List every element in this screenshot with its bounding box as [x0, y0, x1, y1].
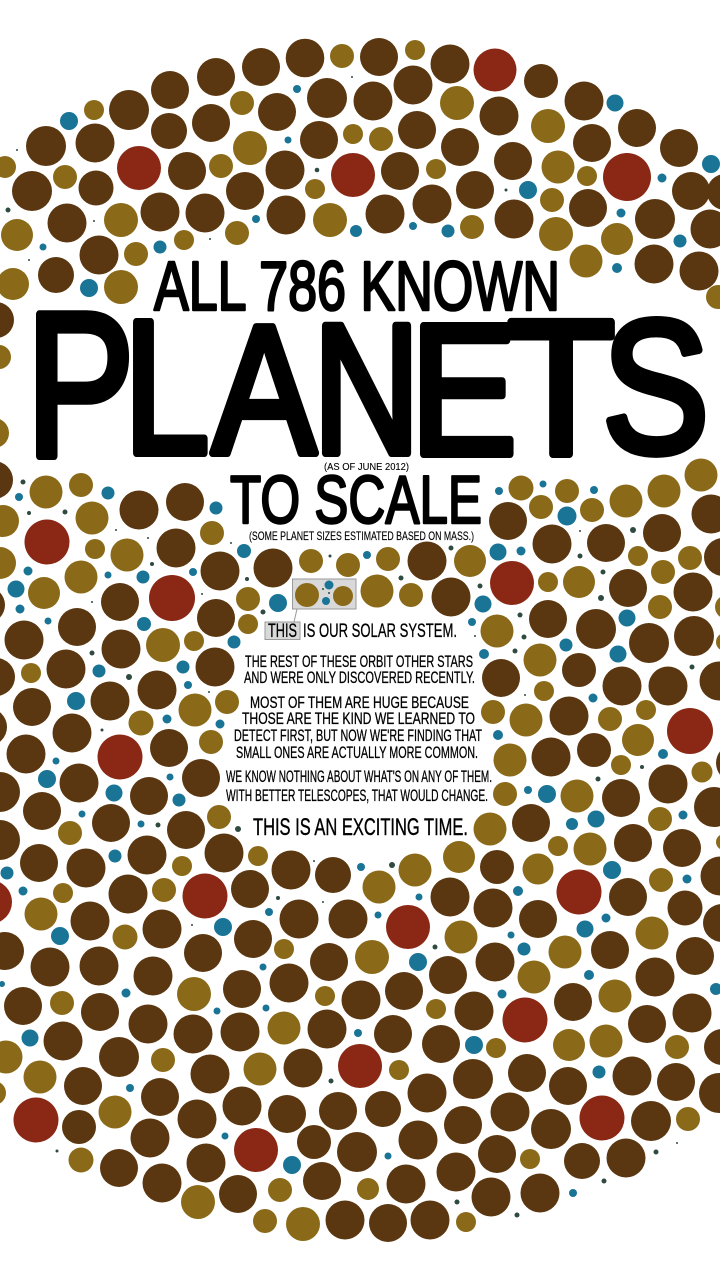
title: planets: N	[313, 285, 420, 493]
title: planets: E	[410, 286, 517, 494]
paragraph: rest orbit other stars: THE REST OF THESE ORBIT OTHER STARS	[245, 653, 473, 671]
paragraph: we know nothing: WE KNOW NOTHING ABOUT WHAT'S ON ANY OF THEM.	[226, 768, 492, 786]
paragraph: rest orbit other stars: AND WERE ONLY DISCOVERED RECENTLY.	[244, 669, 475, 687]
note: planet sizes estimated: (SOME PLANET SIZES ESTIMATED BASED ON MASS.)	[249, 529, 474, 543]
paragraph: most are huge: MOST OF THEM ARE HUGE BECAUSE	[250, 694, 469, 712]
solar system highlight box	[292, 579, 356, 622]
title: planets: S	[602, 282, 709, 493]
paragraph: most are huge: DETECT FIRST, BUT NOW WE'RE FINDING THAT	[234, 727, 482, 745]
label: this is our solar system: IS OUR SOLAR SYSTEM.	[303, 621, 457, 642]
title: planets: L	[124, 281, 210, 494]
paragraph: we know nothing: WITH BETTER TELESCOPES, THAT WOULD CHANGE.	[226, 787, 488, 805]
title: planets: T	[507, 281, 615, 496]
label: this is our solar system	[265, 621, 457, 642]
label: this is our solar system: THIS	[268, 621, 297, 642]
closing line: exciting time: THIS IS AN EXCITING TIME.	[253, 814, 468, 841]
title: planets	[26, 271, 709, 500]
paragraph: we know nothing	[226, 768, 492, 805]
paragraph: most are huge	[234, 694, 482, 762]
paragraph: most are huge: SMALL ONES ARE ACTUALLY MORE COMMON.	[236, 744, 478, 762]
title: planets: P	[26, 271, 134, 500]
title: planets: A	[212, 288, 316, 493]
heading: to scale: TO SCALE	[230, 462, 482, 538]
paragraph: most are huge: THOSE ARE THE KIND WE LEARNED TO	[242, 710, 475, 728]
paragraph: rest orbit other stars	[244, 653, 475, 687]
note: as of june 2012: (AS OF JUNE 2012)	[324, 462, 409, 473]
title: all 786 known: ALL 786 KNOWN	[154, 247, 560, 325]
